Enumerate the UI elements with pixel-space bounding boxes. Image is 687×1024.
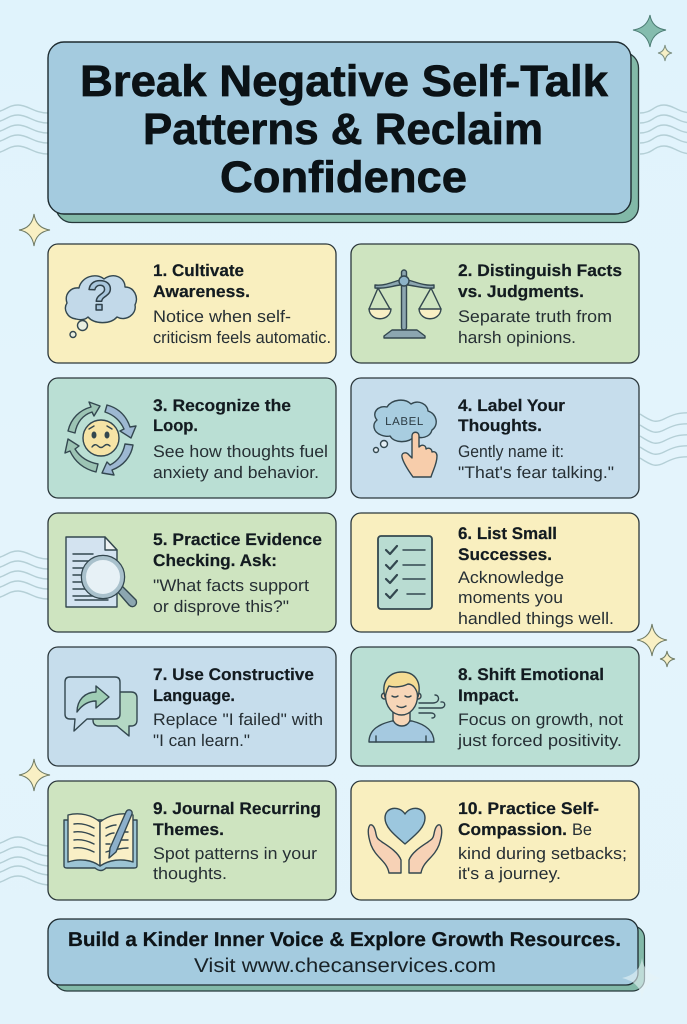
text: card 7: 7. Use Constructive	[153, 665, 314, 684]
text: card 10: it's a journey.	[458, 864, 561, 883]
text: card 2: Separate truth from	[458, 307, 612, 326]
text: card 7: Replace "I failed" with	[153, 710, 323, 729]
text: card 3: See how thoughts fuel	[153, 442, 328, 461]
panel: 5 evidence checking	[48, 513, 336, 632]
text: card 1: 1. Cultivate	[153, 261, 244, 280]
text: card 10: Compassion.	[458, 820, 567, 839]
text: card 6: Successes.	[458, 545, 552, 564]
text: card 6: handled things well.	[458, 609, 614, 628]
panel: 3 recognize the loop	[48, 378, 336, 498]
text: card 9	[153, 799, 321, 883]
icon: label cloud and pointing hand	[374, 400, 437, 477]
sparkle: top right small	[658, 45, 672, 61]
text: card 9: thoughts.	[153, 864, 227, 883]
text: card 9: 9. Journal Recurring	[153, 799, 321, 818]
text: card 6	[458, 524, 614, 628]
sparkle: faint white on footer corner	[622, 958, 661, 998]
text: card 7	[153, 665, 323, 750]
text: card 7: Language.	[153, 686, 235, 705]
text: card 10: kind during setbacks;	[458, 844, 627, 863]
text: card 1: Awareness.	[153, 282, 250, 301]
text: card 2: harsh opinions.	[458, 328, 576, 347]
panel: 10 practice self-compassion	[351, 781, 639, 900]
title: Break Negative Self-Talk	[80, 57, 609, 106]
title: Confidence	[220, 153, 467, 202]
icon: thought cloud with question mark	[65, 272, 136, 338]
icon: balance scale	[369, 270, 441, 338]
text: card 6: 6. List Small	[458, 524, 557, 543]
sparkle: left yellow lower	[19, 759, 50, 791]
text: card 5	[153, 530, 322, 616]
panel: 1 cultivate awareness	[48, 244, 336, 363]
sparkle: right small	[660, 651, 675, 667]
panel: 4 label your thoughts	[351, 378, 639, 498]
panel: 9 journal recurring themes	[48, 781, 336, 900]
title panel	[48, 42, 638, 222]
icon: heart held in hands	[368, 808, 442, 873]
text: card 7: "I can learn."	[153, 731, 250, 750]
text: card 8: 8. Shift Emotional	[458, 665, 604, 684]
panel: 6 list small successes	[351, 513, 639, 632]
text: card 9: Spot patterns in your	[153, 844, 317, 863]
text: card 3: anxiety and behavior.	[153, 463, 319, 482]
text: card 3	[153, 396, 328, 482]
text: card 8: just forced positivity.	[457, 731, 622, 750]
panel: 7 constructive language	[48, 647, 336, 766]
text: card 10	[458, 799, 627, 883]
panel: 2 distinguish facts	[351, 244, 639, 363]
text: card 2: 2. Distinguish Facts	[458, 261, 622, 280]
text: card 4: "That's fear talking."	[458, 463, 614, 482]
text: card 1: Notice when self-	[153, 307, 291, 326]
icon: label cloud and pointing hand: LABEL	[385, 416, 424, 428]
text: card 3: Loop.	[153, 416, 198, 435]
text: card 8	[457, 665, 623, 750]
icon: thought cloud with question mark: ?	[87, 272, 113, 319]
title: Patterns & Reclaim	[143, 105, 543, 154]
text: card 2	[458, 261, 622, 347]
text: card 8: Impact.	[458, 686, 519, 705]
footer banner	[48, 919, 661, 998]
footer text	[68, 929, 621, 977]
icon: document with magnifier	[66, 537, 136, 607]
text: card 8: Focus on growth, not	[458, 710, 623, 729]
title	[80, 57, 609, 202]
text: card 4: 4. Label Your	[458, 396, 565, 415]
text: card 4: Thoughts.	[458, 416, 542, 435]
icon: speech bubbles with arrow	[65, 677, 137, 736]
text: card 4	[458, 396, 614, 482]
text: card 5: "What facts support	[153, 576, 309, 595]
sparkle: top right teal	[633, 15, 666, 47]
text: card 1: criticism feels automatic.	[153, 328, 331, 347]
footer text: Visit www.checanservices.com	[194, 955, 496, 977]
text: card 10: Be	[572, 820, 592, 839]
text: card 9: Themes.	[153, 820, 224, 839]
sparkle: right yellow	[637, 624, 667, 656]
text: card 1	[153, 261, 331, 347]
text: card 2: vs. Judgments.	[458, 282, 584, 301]
icon: open journal and pen	[64, 810, 137, 870]
text: card 5: Checking. Ask:	[153, 551, 277, 570]
text: card 5: 5. Practice Evidence	[153, 530, 322, 549]
text: card 6: Acknowledge	[458, 568, 564, 587]
text: card 3: 3. Recognize the	[153, 396, 291, 415]
icon: checklist	[378, 536, 432, 609]
icon: calm person breathing out	[369, 672, 445, 742]
sparkle: left yellow upper	[19, 214, 50, 246]
text: card 6: moments you	[458, 588, 563, 607]
icon: anxious face in loop	[65, 402, 136, 475]
text: card 4: Gently name it:	[458, 442, 564, 461]
footer text: Build a Kinder Inner Voice & Explore Growth Resources.	[68, 929, 621, 951]
text: card 10: 10. Practice Self-	[458, 799, 599, 818]
panel: 8 shift emotional impact	[351, 647, 639, 766]
text: card 5: or disprove this?"	[153, 597, 289, 616]
